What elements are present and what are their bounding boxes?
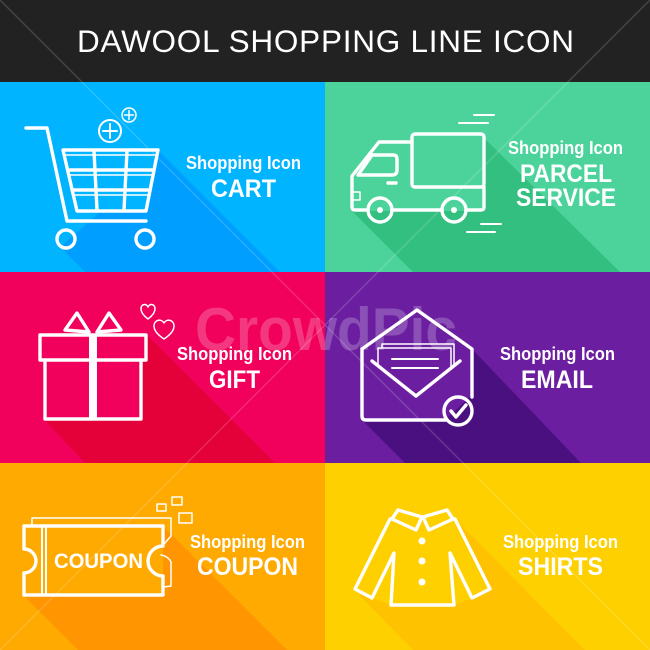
label: cart <box>186 152 301 203</box>
label: gift <box>177 343 292 394</box>
panel: gift <box>0 272 325 463</box>
label: coupon: Shopping Icon <box>190 531 305 552</box>
title: DAWOOL SHOPPING LINE ICON <box>77 23 574 59</box>
label: parcel service: SERVICE <box>516 184 616 212</box>
header bar <box>0 0 650 82</box>
label: cart: Shopping Icon <box>186 152 301 173</box>
label: gift: GIFT <box>209 366 260 394</box>
label: coupon <box>190 531 305 581</box>
panel: coupon <box>0 463 325 650</box>
icon: coupon ticket <box>24 497 192 595</box>
label: parcel service: PARCEL <box>520 160 612 188</box>
icon: coupon ticket: COUPON <box>54 550 143 573</box>
label: shirts: Shopping Icon <box>503 531 618 552</box>
panel: cart <box>0 82 325 272</box>
icon: open envelope <box>362 310 472 425</box>
icon: delivery truck <box>352 115 501 232</box>
label: parcel service <box>508 137 623 212</box>
label: email: Shopping Icon <box>500 343 615 364</box>
label: parcel service: Shopping Icon <box>508 137 623 158</box>
label: shirts: SHIRTS <box>518 553 603 581</box>
label: email <box>500 343 615 394</box>
label: coupon: COUPON <box>197 553 298 581</box>
icon: shopping cart <box>26 108 158 248</box>
label: cart: CART <box>211 175 276 203</box>
label: email: EMAIL <box>521 366 593 394</box>
panel: shirts <box>325 463 650 650</box>
icon: gift box <box>40 305 174 419</box>
panel: parcel service <box>325 82 650 272</box>
label: gift: Shopping Icon <box>177 343 292 364</box>
panel: email <box>325 272 650 463</box>
icon: shirt <box>355 510 490 605</box>
label: shirts <box>503 531 618 581</box>
watermark: CrowdPic <box>195 296 457 363</box>
